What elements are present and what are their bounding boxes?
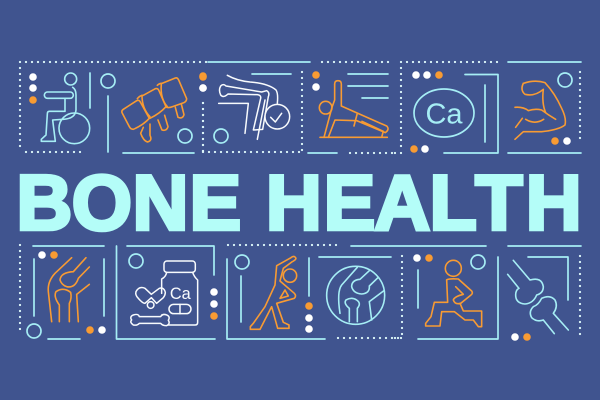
panel: yoga	[308, 71, 388, 153]
icon: flexed arm	[515, 81, 565, 139]
icon: bone joint	[508, 260, 568, 334]
icon: vertebrae	[122, 78, 187, 142]
icon: supplement bottle: Ca	[170, 285, 192, 303]
panel: stretching	[227, 245, 342, 339]
icon: knee joint	[48, 258, 89, 322]
title: BONE HEALTH	[16, 161, 582, 247]
panel: lunge	[395, 254, 498, 339]
icon: broken leg check	[219, 75, 290, 139]
panel: supplements	[116, 246, 218, 339]
icon: side plank figure	[319, 81, 388, 137]
panel: knee	[20, 245, 106, 339]
panel: joint circle	[319, 246, 486, 338]
icon: side bend figure	[250, 256, 297, 329]
panel: calcium	[395, 62, 500, 153]
icon: wheelchair user	[41, 73, 90, 144]
icon: joint in circle	[327, 266, 385, 324]
icon: calcium ellipse: Ca	[425, 98, 463, 130]
panel: spine	[101, 73, 207, 153]
panel: leg bones	[199, 62, 395, 153]
panel: muscle	[508, 62, 581, 153]
panel: wheelchair	[20, 62, 208, 152]
icon: lunge figure	[426, 260, 482, 327]
panel: bone joint	[508, 246, 581, 341]
